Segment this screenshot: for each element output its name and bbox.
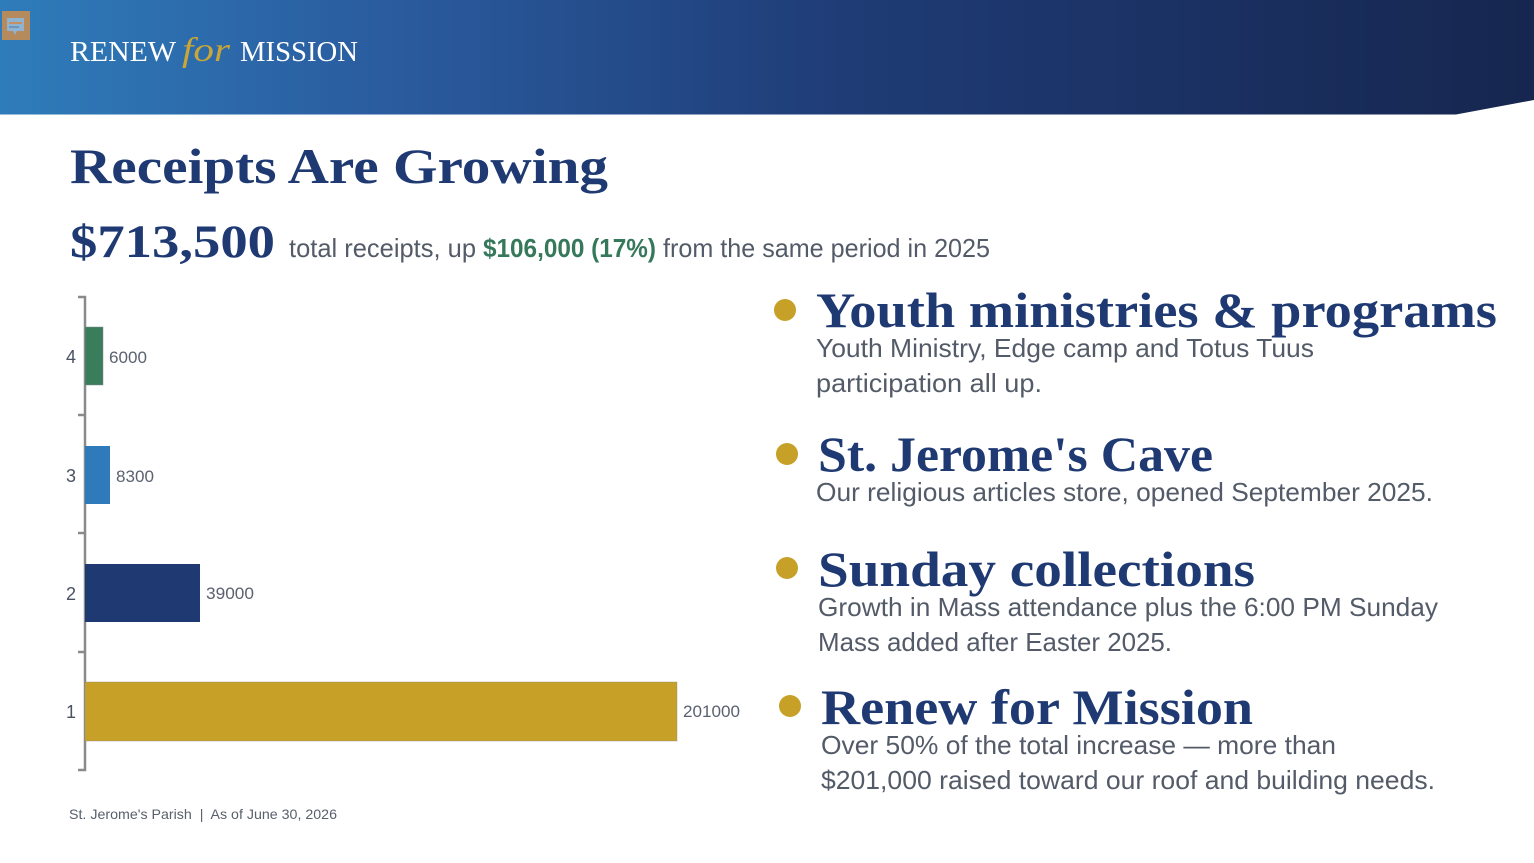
summary line: $713,500 bbox=[70, 216, 275, 268]
summary line: $106,000 (17%) bbox=[483, 233, 656, 263]
heading: St. Jerome's Cave bbox=[818, 426, 1213, 482]
title: Receipts Are Growing bbox=[70, 138, 608, 194]
bar 1: 1 bbox=[66, 702, 76, 722]
bar 3: 3 bbox=[66, 466, 76, 486]
description: $201,000 raised toward our roof and building needs. bbox=[821, 765, 1435, 795]
summary line bbox=[70, 216, 990, 268]
logo wordmark bbox=[70, 32, 358, 69]
logo wordmark: for bbox=[182, 32, 231, 69]
chart axis bbox=[78, 297, 85, 770]
summary line: total receipts, up bbox=[289, 233, 476, 263]
description: Growth in Mass attendance plus the 6:00 PM Sunday bbox=[818, 592, 1438, 622]
item: Renew for Mission bbox=[779, 679, 1435, 795]
logo wordmark: RENEW bbox=[70, 36, 177, 68]
item: youth ministries bbox=[774, 282, 1497, 398]
icon: comment badge bbox=[2, 11, 30, 40]
description bbox=[816, 333, 1314, 398]
bar 4: 6000 bbox=[109, 348, 147, 367]
footer note: St. Jerome's Parish | As of June 30, 2026 bbox=[69, 806, 337, 822]
logo wordmark: MISSION bbox=[240, 36, 358, 68]
bar 2: 2 bbox=[66, 584, 76, 604]
header banner bbox=[0, 0, 1534, 114]
description: Mass added after Easter 2025. bbox=[818, 627, 1172, 657]
bullet bbox=[779, 695, 801, 717]
item: Sunday collections bbox=[776, 541, 1438, 657]
description bbox=[821, 730, 1435, 795]
heading: Sunday collections bbox=[818, 541, 1255, 597]
description bbox=[818, 592, 1438, 657]
description: participation all up. bbox=[816, 368, 1042, 398]
bar 3 bbox=[66, 446, 154, 504]
description: Youth Ministry, Edge camp and Totus Tuus bbox=[816, 333, 1314, 363]
bullet bbox=[776, 557, 798, 579]
description: Our religious articles store, opened September 2025. bbox=[816, 477, 1433, 507]
item: St. Jerome's Cave bbox=[776, 426, 1433, 507]
bullet bbox=[774, 299, 796, 321]
bar 1 bbox=[66, 682, 740, 741]
summary line: from the same period in 2025 bbox=[663, 233, 990, 263]
heading: Youth ministries & programs bbox=[816, 282, 1497, 338]
heading: Renew for Mission bbox=[821, 679, 1253, 735]
bar chart bbox=[66, 297, 740, 770]
description: Over 50% of the total increase — more than bbox=[821, 730, 1336, 760]
bar 4: 4 bbox=[66, 347, 76, 367]
bullet bbox=[776, 443, 798, 465]
bar 1: 201000 bbox=[683, 702, 740, 721]
bar 3: 8300 bbox=[116, 467, 154, 486]
bar 2 bbox=[66, 564, 254, 622]
bar 2: 39000 bbox=[206, 584, 254, 603]
bar 4 bbox=[66, 327, 147, 385]
